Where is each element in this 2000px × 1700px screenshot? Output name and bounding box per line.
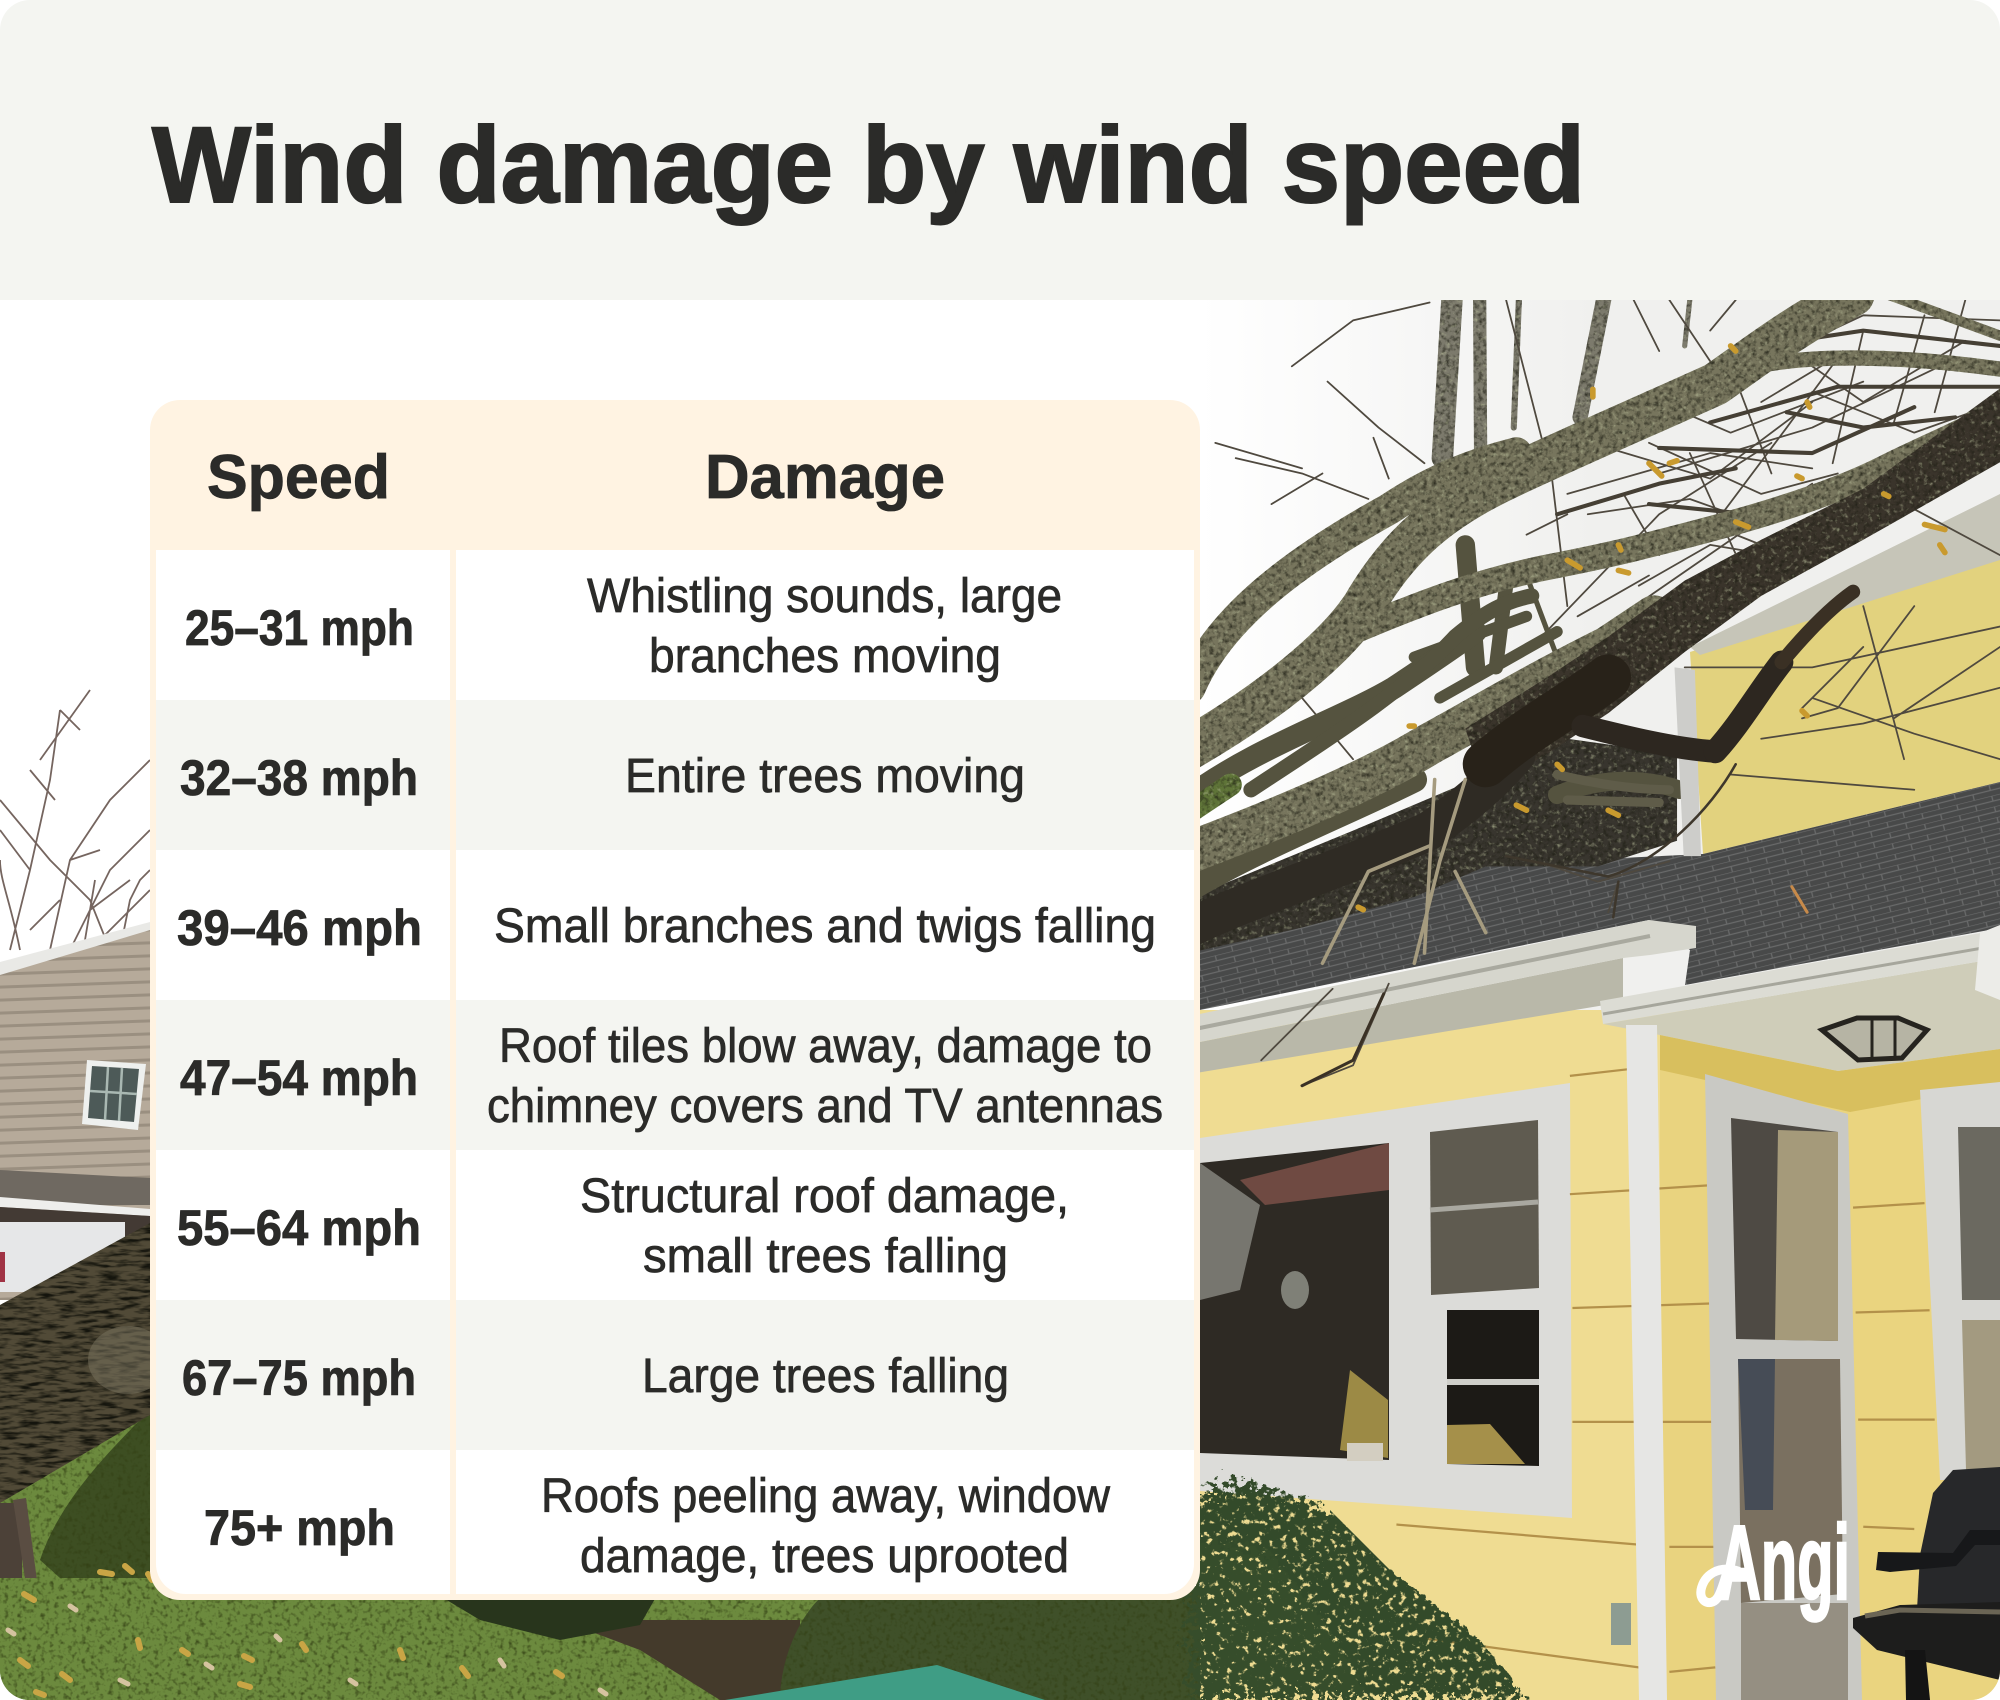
green shrub against wall	[1190, 1480, 1520, 1700]
dark lower mass over the roof	[1180, 739, 1677, 951]
row: 75+ mph	[156, 1450, 1194, 1594]
neighbouring house and fallen trunk on the left	[0, 690, 150, 1700]
row: 25–31 mph: branches moving	[649, 630, 1001, 683]
white downspout column	[1626, 1025, 1667, 1700]
row: 55–64 mph: small trees falling	[643, 1230, 1008, 1283]
front door	[1705, 1074, 1862, 1700]
neighbour window	[82, 1060, 146, 1130]
table header: damage: Damage	[705, 443, 945, 512]
row: 55–64 mph: Structural roof damage,	[580, 1170, 1069, 1223]
row: 32–38 mph: 32–38 mph	[180, 750, 418, 806]
big front window	[1200, 1083, 1572, 1518]
row: 75+ mph: Roofs peeling away, window	[541, 1470, 1110, 1523]
row: 25–31 mph: Whistling sounds, large	[587, 570, 1062, 623]
dark main trunk	[1465, 388, 2000, 750]
right porch window	[1920, 1082, 2000, 1480]
downspout under branches	[1674, 667, 1701, 856]
yellow house walls	[1200, 494, 2000, 1700]
row: 67–75 mph	[156, 1300, 1194, 1450]
row: 47–54 mph	[156, 1000, 1194, 1150]
row: 25–31 mph	[156, 550, 1194, 700]
row: 32–38 mph: Entire trees moving	[625, 750, 1025, 803]
shadow limbs between the mossy boughs	[1185, 545, 1680, 892]
thin bare twigs	[1215, 300, 2000, 1086]
row: 75+ mph: 75+ mph	[204, 1500, 395, 1556]
roof gutters and porch ceiling	[1190, 920, 2000, 1074]
row: 25–31 mph: 25–31 mph	[185, 600, 414, 656]
barbecue grill	[1853, 1467, 2000, 1700]
row: 55–64 mph	[156, 1150, 1194, 1300]
row: 75+ mph: damage, trees uprooted	[580, 1530, 1069, 1583]
table header: speed: Speed	[207, 443, 390, 512]
lawn and shrubs along the bottom	[0, 1566, 1220, 1700]
title: Wind damage by wind speed	[152, 104, 1585, 225]
medium dark limbs in the crown	[1557, 331, 2000, 514]
row: 47–54 mph: chimney covers and TV antennas	[487, 1080, 1163, 1133]
shingled roof	[1180, 782, 2000, 1014]
row: 32–38 mph	[156, 700, 1194, 850]
Angi logo: Angi	[1718, 1504, 1850, 1622]
wall switch box	[1611, 1603, 1631, 1645]
fallen leaves on lawn	[8, 1566, 606, 1695]
row: 39–46 mph	[156, 850, 1194, 1000]
row: 55–64 mph: 55–64 mph	[177, 1200, 421, 1256]
broken dark stub	[1583, 726, 1715, 752]
tree branches fallen on the roof	[1180, 290, 2000, 1086]
background tree trunks	[1442, 290, 1690, 458]
siding lap lines	[1396, 1069, 1935, 1672]
Angi logo	[1696, 1520, 1846, 1623]
row: 39–46 mph: Small branches and twigs falling	[494, 900, 1156, 953]
twigs over roof	[1506, 764, 1736, 917]
row: 47–54 mph: Roof tiles blow away, damage to	[499, 1020, 1152, 1073]
row: 47–54 mph: 47–54 mph	[180, 1050, 418, 1106]
row: 39–46 mph: 39–46 mph	[177, 900, 422, 956]
mossy limbs	[1180, 295, 2000, 856]
autumn leaves	[1358, 346, 1945, 910]
green bin	[725, 1665, 1045, 1700]
row: 67–75 mph: 67–75 mph	[182, 1350, 416, 1406]
lower small limbs	[1557, 774, 1669, 803]
wind speed damage table	[150, 400, 1200, 1600]
porch ceiling lamp	[1822, 1018, 1927, 1060]
row: 67–75 mph: Large trees falling	[642, 1350, 1009, 1403]
header band	[0, 0, 2000, 300]
